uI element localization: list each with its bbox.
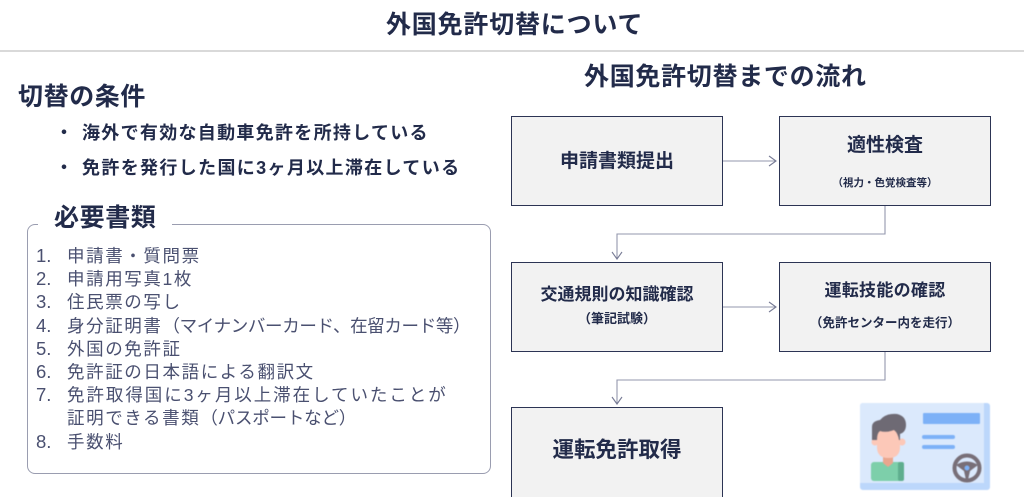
step 2 (779, 116, 991, 206)
step 5 label: 運転免許取得 (552, 438, 682, 462)
header divider (0, 50, 1024, 52)
heading: required documents: 必要書類 (54, 204, 156, 232)
item 4: 4. (36, 315, 51, 336)
conditions list (55, 123, 460, 178)
item 7: 7. (36, 384, 51, 405)
item 1: 1. (36, 245, 51, 266)
condition 1: 海外で有効な自動車免許を所持している (82, 123, 429, 143)
item 6: 免許証の日本語による翻訳文 (67, 362, 315, 382)
item 6: 6. (36, 361, 51, 382)
arrow: step 2 to 3 (612, 206, 885, 259)
item 4: 身分証明書（マイナンバーカード、在留カード等） (67, 316, 470, 336)
item 3: 住民票の写し (67, 292, 182, 312)
item 8: 手数料 (67, 432, 124, 452)
panel border (27, 224, 491, 474)
item 1: 申請書・質問票 (67, 246, 201, 266)
step 3 (511, 262, 723, 352)
heading: required documents (38, 200, 172, 236)
item 8: 8. (36, 431, 51, 452)
document list (36, 245, 470, 452)
item 5: 5. (36, 338, 51, 359)
step 3 note: （筆記試験） (578, 311, 656, 326)
arrow: step 4 to 5 (612, 352, 885, 404)
condition 1: ・ (55, 123, 73, 143)
step 4 label: 運転技能の確認 (824, 281, 946, 300)
title: 外国免許切替について (386, 11, 643, 39)
step 2 label: 適性検査 (847, 135, 923, 156)
step 5 (511, 407, 723, 497)
item 5: 外国の免許証 (67, 339, 182, 359)
item 8 (36, 431, 124, 452)
arrow: step 1 to 2 (723, 156, 776, 166)
condition 2: ・ (55, 158, 73, 178)
condition 2: 免許を発行した国に3ヶ月以上滞在している (82, 158, 460, 178)
heading: flow: 外国免許切替までの流れ (584, 63, 867, 91)
step 2 note: （視力・色覚検査等） (832, 177, 938, 189)
step 4 note: （免許センター内を走行） (810, 316, 960, 330)
item 7: 免許取得国に3ヶ月以上滞在していたことが (67, 385, 448, 405)
heading: conditions: 切替の条件 (18, 83, 146, 111)
item 7 continued: 証明できる書類（パスポートなど） (67, 408, 356, 428)
item 2: 2. (36, 268, 51, 289)
step 4 (779, 262, 991, 352)
item 2: 申請用写真1枚 (67, 269, 193, 289)
icon: driver license card (860, 402, 990, 490)
step 1 label: 申請書類提出 (560, 151, 674, 172)
step 1 (511, 116, 723, 206)
arrow: step 3 to 4 (723, 302, 776, 312)
item 3: 3. (36, 291, 51, 312)
panel: required documents (27, 204, 491, 474)
step 3 label: 交通規則の知識確認 (540, 285, 694, 304)
